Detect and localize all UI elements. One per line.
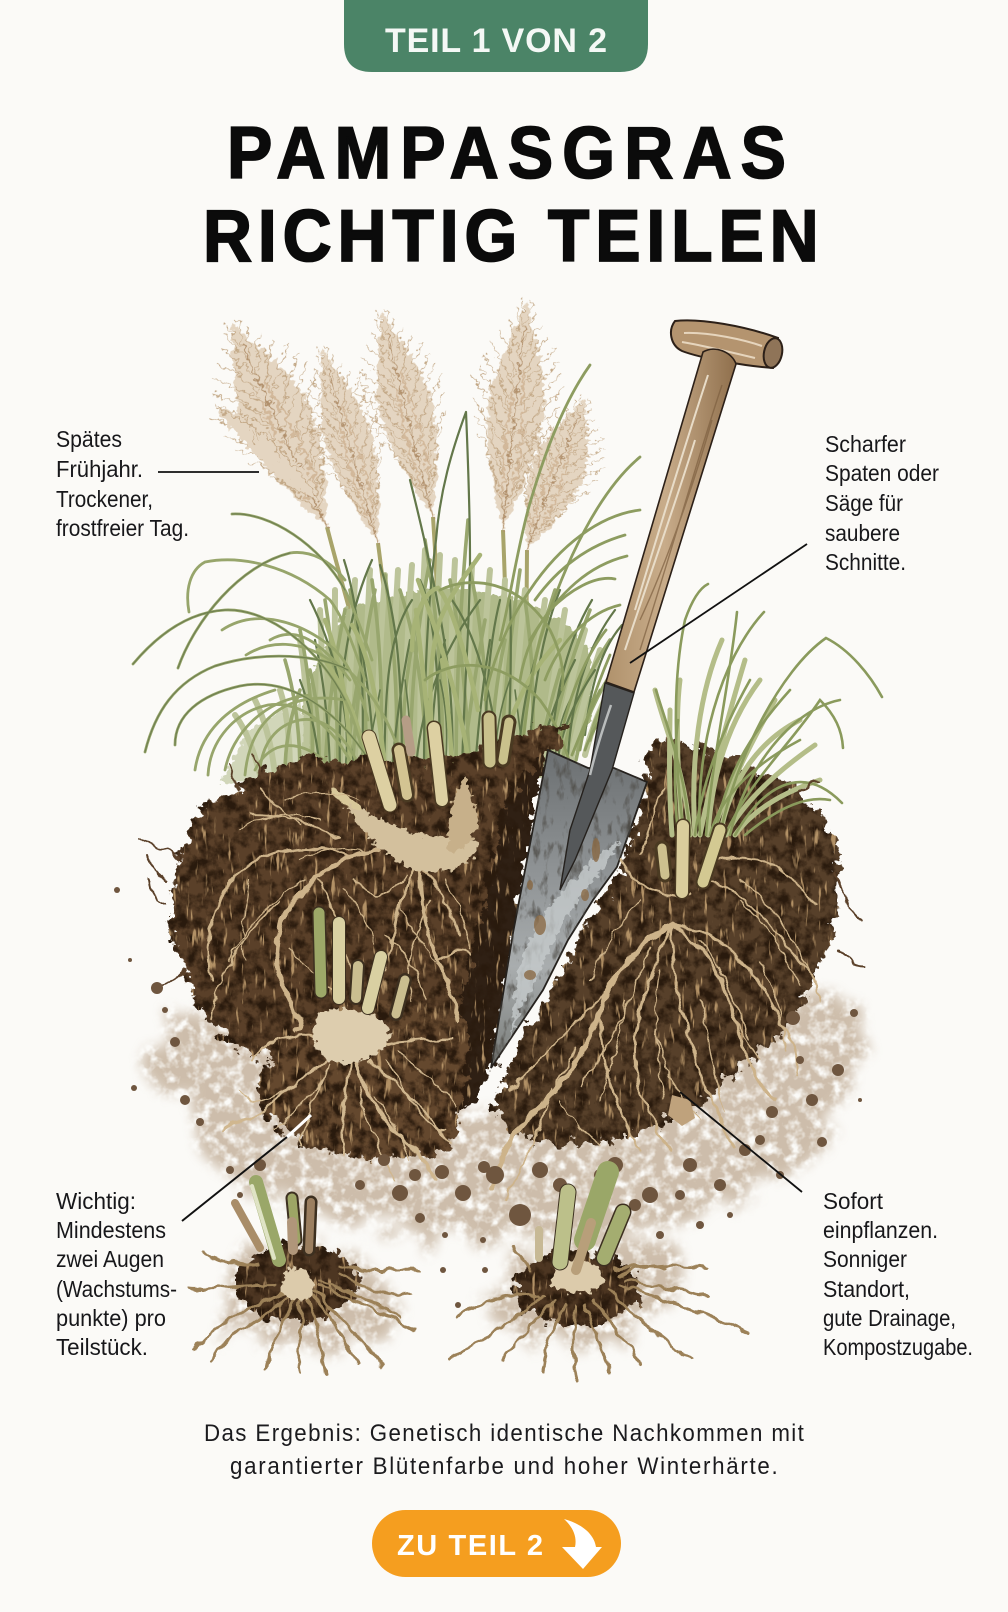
title: PAMPASGRAS [227, 112, 786, 194]
label: tool: Scharfer [825, 431, 906, 457]
mid blades [285, 520, 625, 775]
label: tool: Säge für [825, 490, 903, 516]
badge: Teil 1 von 2: TEIL 1 VON 2 [385, 22, 607, 60]
label: replant: Standort, [823, 1276, 910, 1302]
label: replant: einpflanzen. [823, 1217, 938, 1243]
label: timing: Frühjahr. [56, 456, 143, 482]
neck and ferrule [560, 683, 634, 890]
label: tool [825, 431, 939, 575]
front clod roots [225, 1035, 455, 1180]
label: important: Mindestens [56, 1217, 166, 1243]
left clod crown [345, 775, 480, 872]
button: Zu Teil 2 [372, 1510, 621, 1577]
leader: timing [158, 471, 259, 473]
title: RICHTIG TEILEN [203, 195, 819, 277]
grass mass [300, 590, 590, 778]
clump shoots [539, 1172, 623, 1270]
right clod stems [662, 826, 720, 892]
result text [204, 1419, 804, 1479]
front clod stems [319, 913, 405, 1014]
clump shoots [235, 1182, 311, 1260]
arching left blades [133, 514, 402, 775]
plume 1 side wing [216, 408, 318, 500]
blade light patch [505, 840, 620, 1050]
clump crown [550, 1258, 605, 1294]
label: tool: saubere [825, 520, 900, 546]
left clod roots [208, 790, 470, 1030]
label: timing: Trockener, [56, 486, 153, 512]
label: important: punkte) pro [56, 1305, 166, 1331]
label: important [56, 1188, 177, 1360]
label: timing [56, 426, 189, 541]
title [203, 112, 819, 277]
leader: replant [680, 1092, 802, 1192]
root stone [668, 1095, 695, 1126]
result text: Das Ergebnis: Genetisch identische Nachkommen mit [204, 1419, 804, 1446]
pale base blades [235, 550, 615, 775]
label: tool: Spaten oder [825, 460, 939, 486]
clump soil [237, 1245, 357, 1321]
handle shaft [606, 349, 736, 692]
rust spots [524, 838, 600, 980]
label: tool: Schnitte. [825, 549, 906, 575]
front clod crown [313, 1008, 390, 1064]
result text: garantierter Blütenfarbe und hoher Winterhärte. [230, 1452, 778, 1479]
divided clump right [449, 1172, 748, 1380]
icon: curved arrow [562, 1519, 602, 1569]
blade [491, 750, 647, 1068]
front soil clod [259, 1004, 468, 1159]
plumes [179, 296, 626, 700]
dark crack [445, 752, 545, 1115]
clump crown [280, 1268, 313, 1300]
divided clump left [189, 1182, 421, 1373]
handle grip [671, 320, 785, 370]
label: replant: Kompostzugabe. [823, 1334, 973, 1360]
label: important: zwei Augen [56, 1246, 164, 1272]
shovel [491, 320, 785, 1068]
right grass tuft [655, 584, 882, 835]
right soil clod [495, 737, 840, 1146]
label: replant: Sofort [823, 1188, 884, 1214]
dark blades [300, 412, 622, 770]
label: timing: Spätes [56, 426, 122, 452]
leader: tool [630, 544, 807, 663]
left clod hairs [140, 755, 262, 985]
illustration: pampas grass division [114, 296, 882, 1380]
label: replant [823, 1188, 973, 1360]
label: important: (Wachstums- [56, 1276, 177, 1302]
clump roots [449, 1248, 748, 1380]
left clod cut stems [369, 718, 509, 805]
main grass clump [133, 365, 640, 782]
left soil clod [171, 723, 573, 1085]
badge: Teil 1 von 2 [344, 0, 648, 72]
leader: important [182, 1115, 311, 1221]
clump roots [189, 1250, 421, 1373]
right clod hairs [800, 781, 865, 965]
button: Zu Teil 2: ZU TEIL 2 [397, 1530, 543, 1562]
pale front blades [318, 555, 560, 770]
label: important: Teilstück. [56, 1334, 148, 1360]
plume stems [327, 517, 527, 700]
right clod roots [490, 790, 822, 1200]
label: timing: frostfreier Tag. [56, 515, 189, 541]
label: replant: gute Drainage, [823, 1305, 956, 1331]
label: important: Wichtig: [56, 1188, 136, 1214]
ground wash [150, 990, 860, 1351]
soil crumbs [114, 887, 862, 1308]
clump soil [515, 1252, 639, 1324]
label: replant: Sonniger [823, 1246, 907, 1272]
arching right blades [425, 365, 640, 775]
